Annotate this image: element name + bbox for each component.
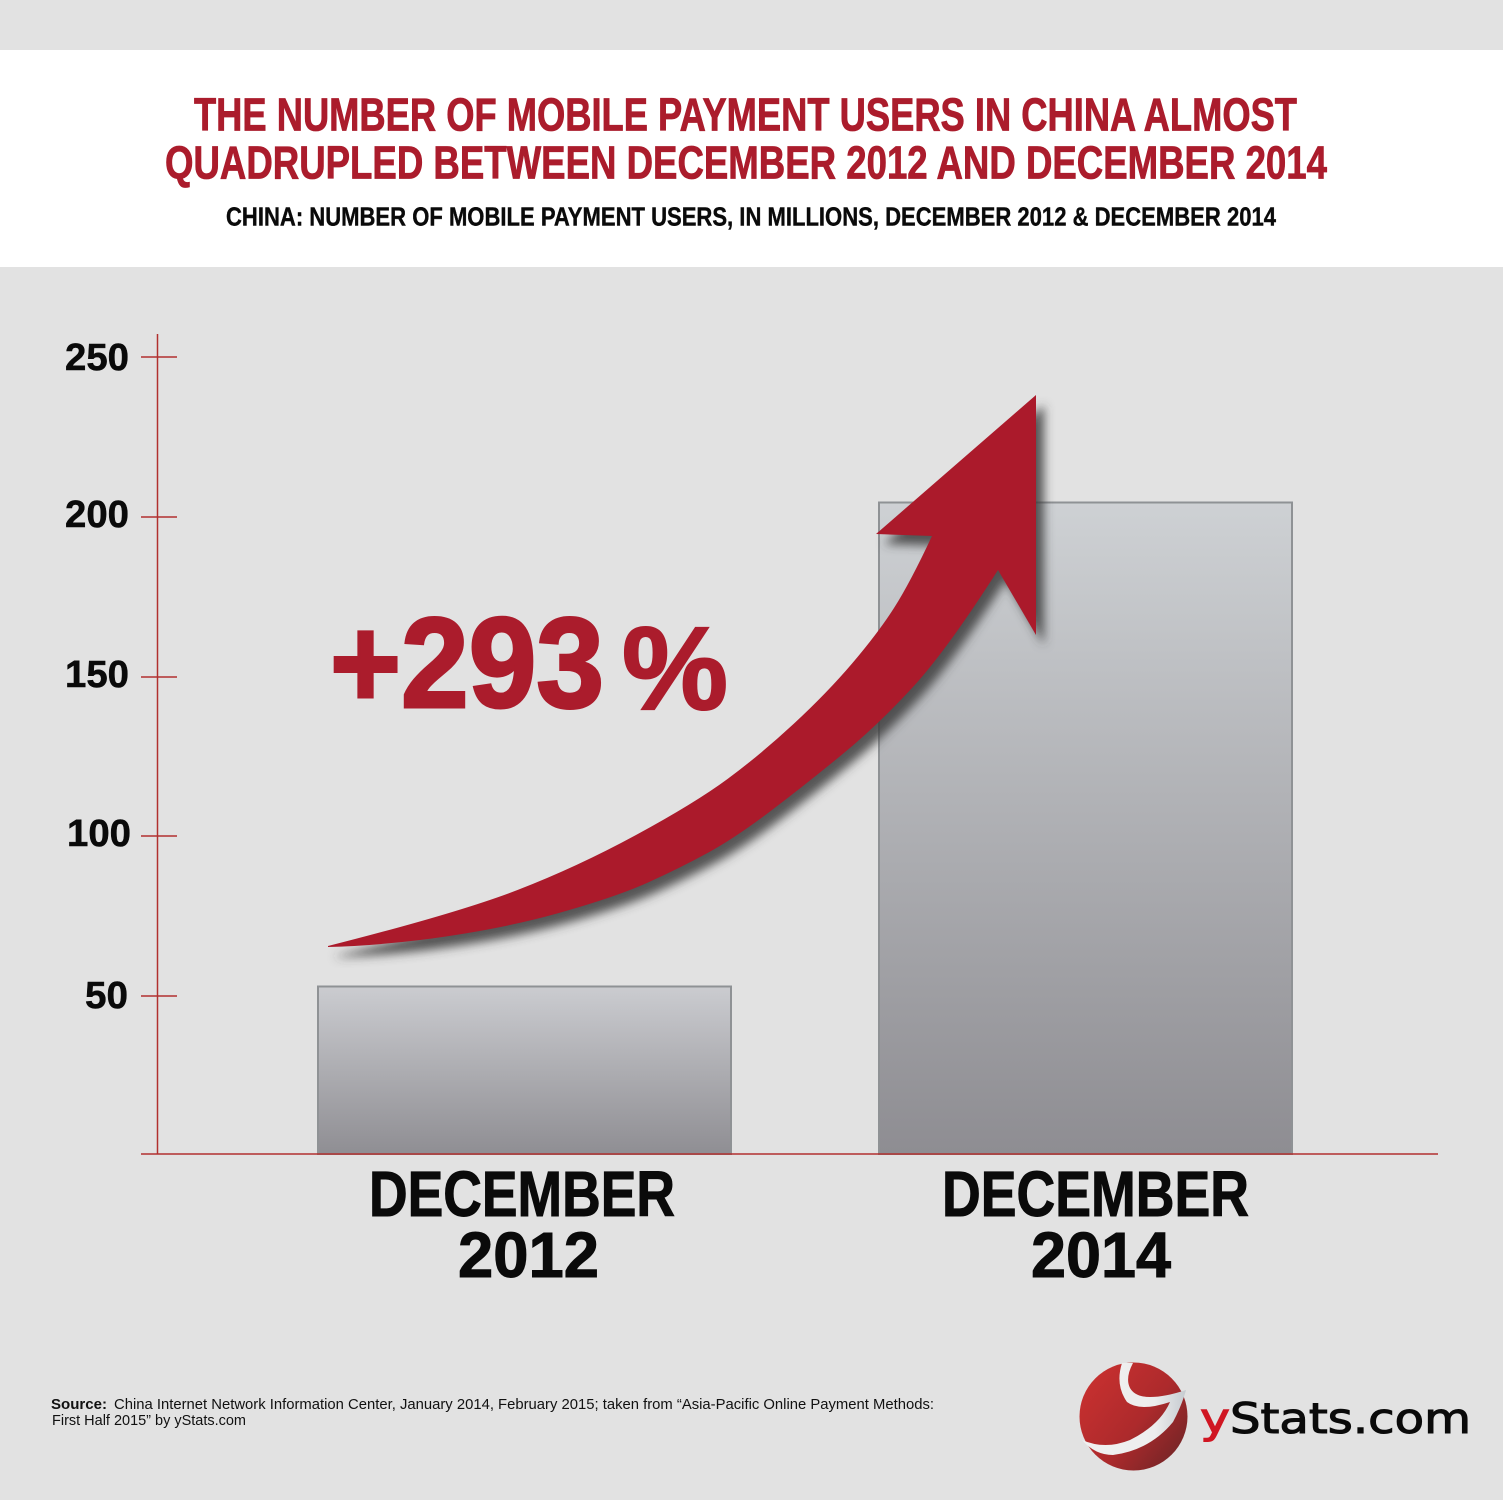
wordmark: Stats.com bbox=[1230, 1394, 1471, 1443]
x axis label: December 2014: DECEMBER bbox=[942, 1158, 1249, 1230]
x axis label: December 2014 bbox=[942, 1158, 1249, 1291]
wordmark: y bbox=[1200, 1394, 1230, 1443]
x axis label: December 2012: 2012 bbox=[458, 1219, 599, 1291]
icon: globe bbox=[1080, 1362, 1188, 1470]
axes bbox=[141, 334, 1438, 1154]
growth arrow bbox=[328, 395, 1044, 957]
bar: December 2012 bbox=[318, 986, 731, 1154]
source note: China Internet Network Information Center, January 2014, February 2015; taken from “Asia-Pacific Online Payment Methods: bbox=[114, 1396, 934, 1413]
x axis label: December 2012 bbox=[369, 1158, 675, 1291]
bar chart bbox=[65, 334, 1438, 1291]
callout: +293 %: % bbox=[622, 603, 728, 735]
y axis labels: 250 bbox=[65, 337, 129, 379]
y axis labels bbox=[65, 337, 131, 1017]
y axis labels: 200 bbox=[65, 494, 129, 536]
source note: Source: bbox=[51, 1396, 107, 1413]
subtitle: CHINA: NUMBER OF MOBILE PAYMENT USERS, IN MILLIONS, DECEMBER 2012 & DECEMBER 2014 bbox=[226, 202, 1276, 232]
y axis labels: 50 bbox=[85, 975, 128, 1017]
y axis labels: 150 bbox=[65, 654, 129, 696]
source note bbox=[51, 1396, 934, 1429]
x axis label: December 2014: 2014 bbox=[1031, 1219, 1171, 1291]
bar: December 2014 bbox=[879, 502, 1292, 1154]
y axis labels: 100 bbox=[67, 813, 131, 855]
x axis label: December 2012: DECEMBER bbox=[369, 1158, 675, 1230]
header panel bbox=[0, 50, 1503, 267]
logo: yStats.com bbox=[1080, 1362, 1471, 1470]
title bbox=[165, 88, 1327, 188]
callout: +293 %: +293 bbox=[330, 592, 604, 735]
source note: First Half 2015” by yStats.com bbox=[52, 1412, 246, 1429]
